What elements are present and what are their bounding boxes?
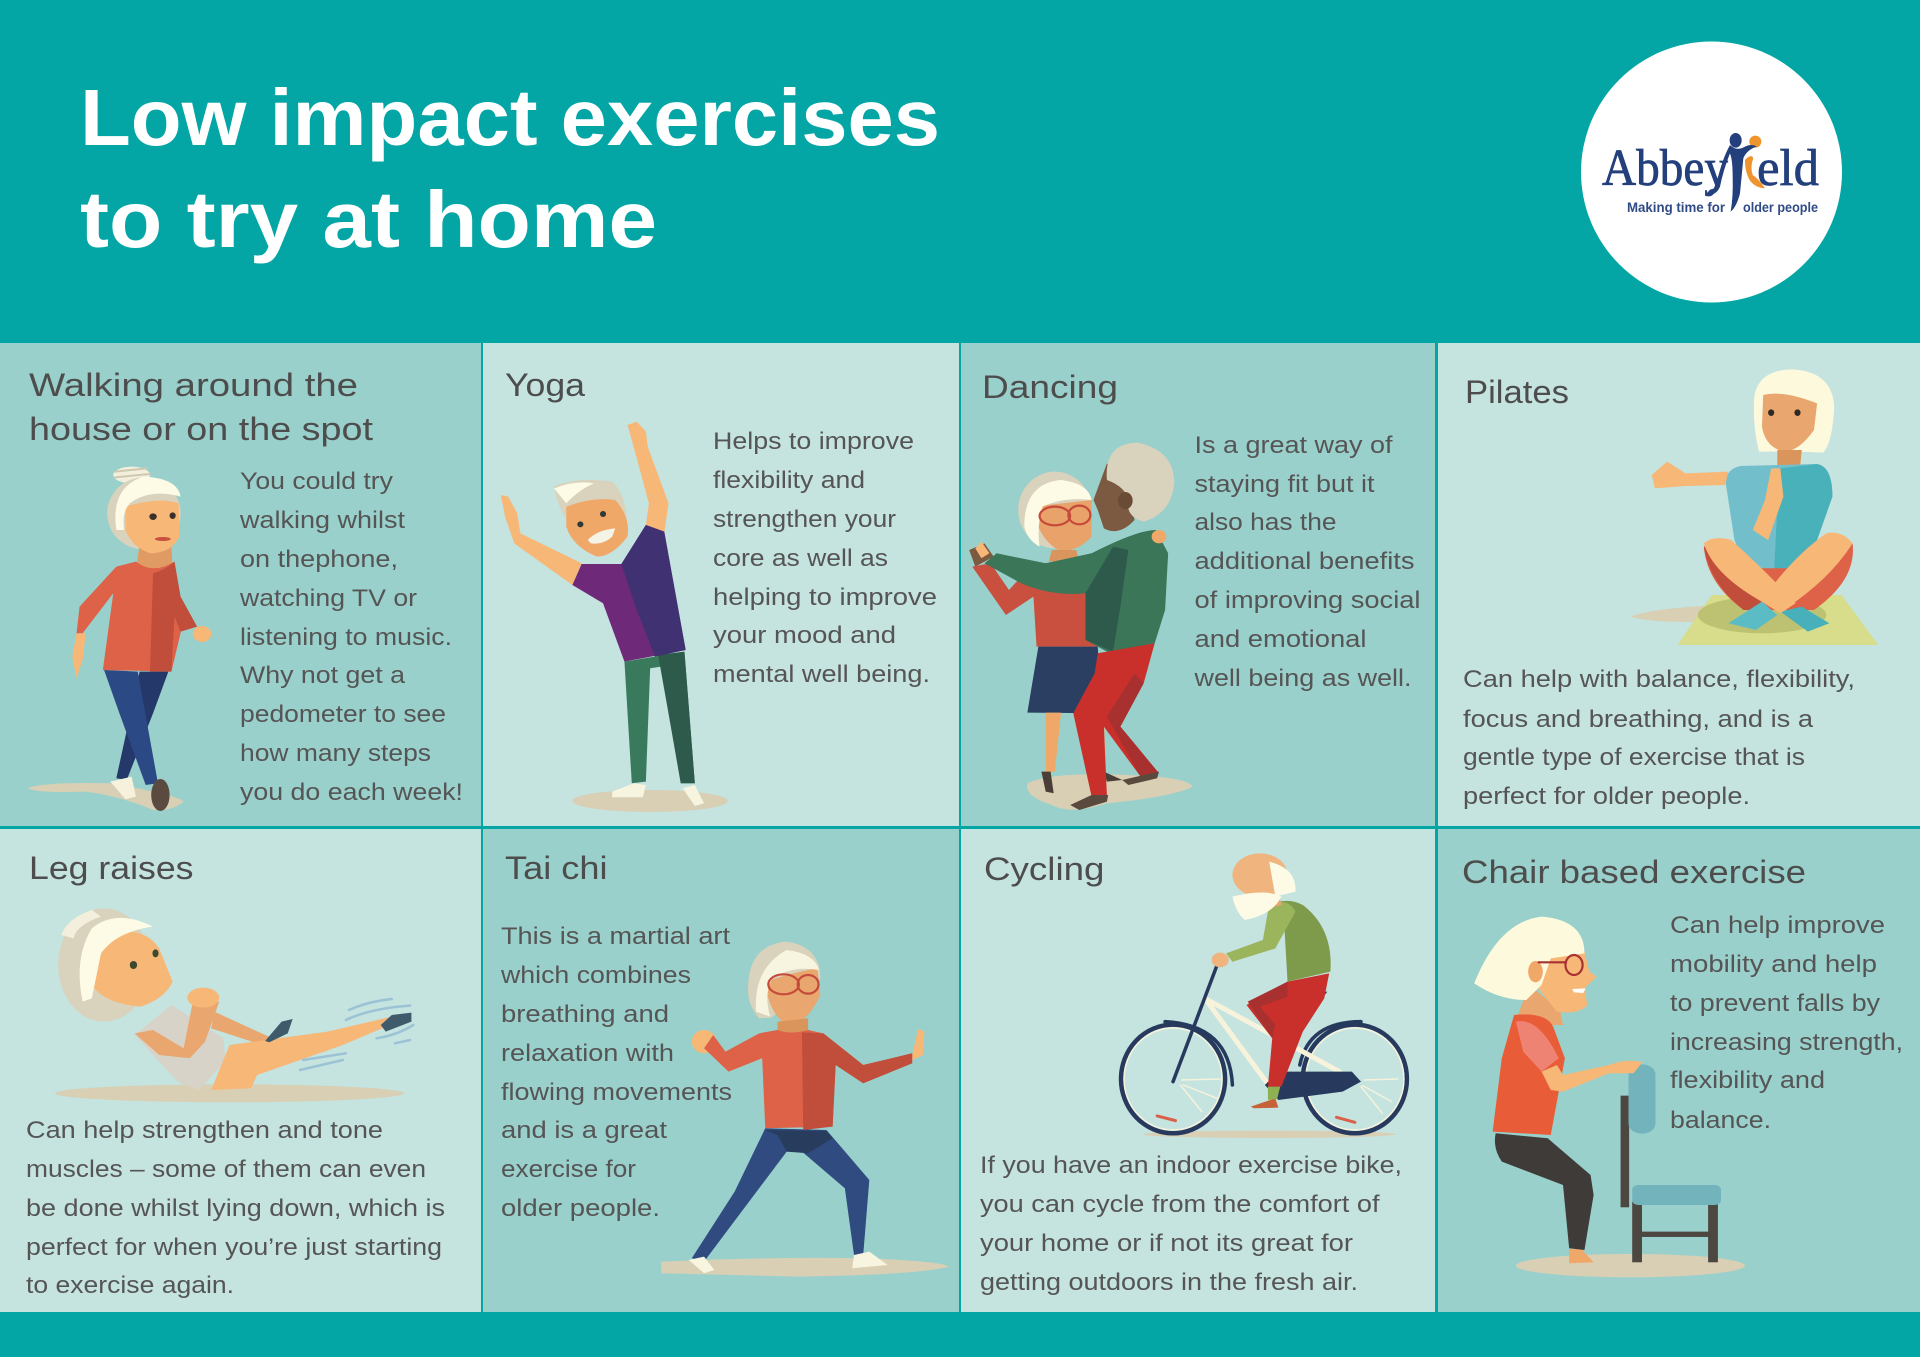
- body text: chair based exercise: mobility and help: [1670, 951, 1877, 978]
- body text: dancing: staying fit but it: [1194, 471, 1375, 498]
- heading: chair based exercise: Chair based exercise: [1462, 854, 1806, 890]
- body text: yoga: Helps to improve: [713, 428, 914, 455]
- body text: chair based exercise: flexibility and: [1670, 1067, 1825, 1094]
- body text: chair based exercise: increasing strength,: [1670, 1029, 1903, 1056]
- body text: tai chi: exercise for: [501, 1156, 636, 1183]
- body text: tai chi: relaxation with: [501, 1040, 674, 1067]
- illustration: leg raises woman: [55, 908, 413, 1102]
- body text: leg raises: perfect for when you’re just starting: [26, 1234, 442, 1261]
- illustration: dancing couple: [969, 443, 1193, 810]
- body text: chair based exercise: [1670, 912, 1903, 1134]
- body text: yoga: core as well as: [713, 545, 888, 572]
- body text: dancing: well being as well.: [1193, 665, 1412, 692]
- body text: walking: how many steps: [240, 740, 431, 767]
- logo: Abbeyfield: older people: [1743, 200, 1818, 215]
- panel: tai chi: [483, 829, 959, 1312]
- body text: cycling: [980, 1152, 1402, 1296]
- body text: yoga: strengthen your: [713, 506, 896, 533]
- body text: chair based exercise: to prevent falls by: [1670, 990, 1880, 1017]
- panel: leg raises: [0, 829, 481, 1312]
- body text: walking: Why not get a: [240, 662, 406, 689]
- logo: Abbeyfield: Abbey: [1602, 140, 1728, 197]
- body text: leg raises: to exercise again.: [26, 1272, 234, 1299]
- body text: pilates: [1463, 666, 1855, 810]
- body text: cycling: you can cycle from the comfort of: [980, 1191, 1380, 1218]
- body text: walking: on thephone,: [240, 546, 398, 573]
- body text: tai chi: flowing movements: [501, 1079, 732, 1106]
- body text: pilates: Can help with balance, flexibility,: [1463, 666, 1855, 693]
- body text: walking: walking whilst: [239, 507, 405, 534]
- body text: pilates: perfect for older people.: [1463, 783, 1750, 810]
- title: to try at home: [80, 175, 657, 264]
- body text: leg raises: be done whilst lying down, which is: [26, 1195, 445, 1222]
- heading: tai chi: Tai chi: [505, 850, 608, 886]
- illustration: yoga man: [501, 422, 728, 812]
- body text: walking: You could try: [240, 468, 393, 495]
- body text: dancing: also has the: [1194, 509, 1336, 536]
- body text: tai chi: breathing and: [501, 1001, 669, 1028]
- panel: yoga: [483, 343, 959, 826]
- body text: yoga: flexibility and: [713, 467, 865, 494]
- body text: walking: listening to music.: [240, 624, 452, 651]
- heading: dancing: Dancing: [982, 369, 1118, 405]
- heading: walking: [29, 367, 373, 447]
- logo: Abbeyfield: [1581, 42, 1842, 302]
- body text: tai chi: which combines: [500, 962, 691, 989]
- body text: walking: you do each week!: [240, 779, 463, 806]
- heading: yoga: Yoga: [505, 367, 585, 403]
- body text: dancing: [1193, 432, 1420, 692]
- body text: leg raises: Can help strengthen and tone: [26, 1117, 383, 1144]
- body text: walking: watching TV or: [239, 585, 417, 612]
- title: Low impact exercises: [80, 73, 940, 162]
- body text: tai chi: This is a martial art: [501, 923, 730, 950]
- illustration: tai chi woman: [661, 942, 949, 1277]
- body text: pilates: gentle type of exercise that is: [1463, 744, 1805, 771]
- body text: cycling: getting outdoors in the fresh air.: [980, 1269, 1358, 1296]
- illustration: cycling man: [1121, 853, 1407, 1138]
- body text: dancing: additional benefits: [1194, 548, 1414, 575]
- heading: walking: house or on the spot: [29, 411, 373, 447]
- body text: leg raises: [26, 1117, 445, 1299]
- panel: cycling: [961, 829, 1435, 1312]
- illustration: pilates woman: [1630, 369, 1878, 645]
- title: [80, 73, 940, 264]
- body text: yoga: helping to improve: [713, 584, 937, 611]
- heading: pilates: Pilates: [1465, 374, 1569, 410]
- body text: dancing: and emotional: [1194, 626, 1366, 653]
- body text: pilates: focus and breathing, and is a: [1463, 706, 1814, 733]
- body text: tai chi: and is a great: [501, 1117, 667, 1144]
- body text: chair based exercise: balance.: [1670, 1107, 1771, 1134]
- body text: dancing: Is a great way of: [1194, 432, 1393, 459]
- body text: yoga: mental well being.: [713, 661, 930, 688]
- body text: cycling: your home or if not its great for: [980, 1230, 1353, 1257]
- body text: walking: [239, 468, 463, 806]
- logo: Abbeyfield: Making time for: [1627, 200, 1726, 215]
- body text: chair based exercise: Can help improve: [1670, 912, 1885, 939]
- panel: pilates: [1438, 343, 1920, 826]
- logo: Abbeyfield: eld: [1757, 140, 1819, 197]
- illustration: walking woman: [28, 467, 211, 811]
- body text: walking: pedometer to see: [240, 701, 446, 728]
- body text: tai chi: older people.: [501, 1195, 660, 1222]
- panel: dancing: [961, 343, 1435, 826]
- body text: yoga: [713, 428, 937, 688]
- body text: cycling: If you have an indoor exercise bike,: [980, 1152, 1402, 1179]
- panel: chair based exercise: [1438, 829, 1920, 1312]
- heading: cycling: Cycling: [984, 851, 1104, 887]
- panel: walking: [0, 343, 481, 826]
- body text: yoga: your mood and: [713, 622, 896, 649]
- body text: leg raises: muscles – some of them can even: [26, 1156, 426, 1183]
- body text: tai chi: [500, 923, 732, 1222]
- illustration: chair exercise woman: [1474, 917, 1745, 1277]
- heading: walking: Walking around the: [29, 367, 358, 403]
- body text: dancing: of improving social: [1194, 587, 1420, 614]
- heading: leg raises: Leg raises: [29, 850, 194, 886]
